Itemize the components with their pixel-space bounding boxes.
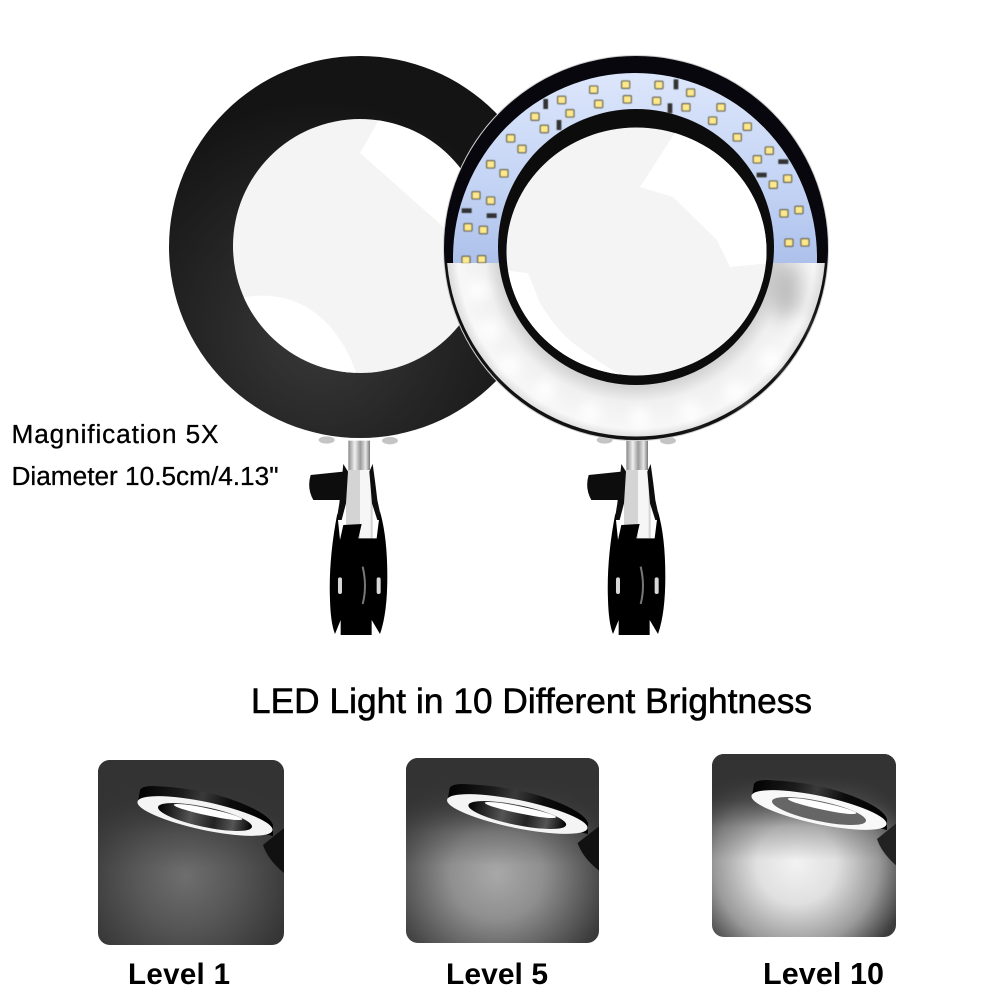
black inner bezel xyxy=(498,109,774,385)
lamp illustration xyxy=(749,780,898,867)
heading: LED Light in 10 Different Brightness xyxy=(251,682,812,721)
right magnifier: LED side of ring xyxy=(443,55,829,443)
right magnifier stand xyxy=(587,436,676,635)
magnifying lens xyxy=(506,128,766,376)
specification text xyxy=(12,419,278,491)
lower half: white diffuser xyxy=(444,263,828,440)
left magnifier: back of ring with lens xyxy=(169,56,497,438)
label: level 5: Level 5 xyxy=(446,958,548,991)
lamp illustration xyxy=(135,786,284,873)
LED chips xyxy=(462,79,809,264)
resistors xyxy=(462,79,788,218)
panel: level 1 xyxy=(98,760,284,945)
label: level 10: Level 10 xyxy=(763,957,884,991)
panel: level 5 xyxy=(406,758,599,943)
panel: level 10 xyxy=(712,754,898,937)
lamp illustration xyxy=(444,784,599,871)
specification text: Magnification 5X xyxy=(12,419,218,449)
upper half: black rim and blue LED board xyxy=(444,56,828,263)
lens highlights xyxy=(508,133,766,374)
left magnifier stand xyxy=(309,436,398,635)
label: level 1: Level 1 xyxy=(128,958,230,991)
specification text: Diameter 10.5cm/4.13" xyxy=(12,461,278,491)
